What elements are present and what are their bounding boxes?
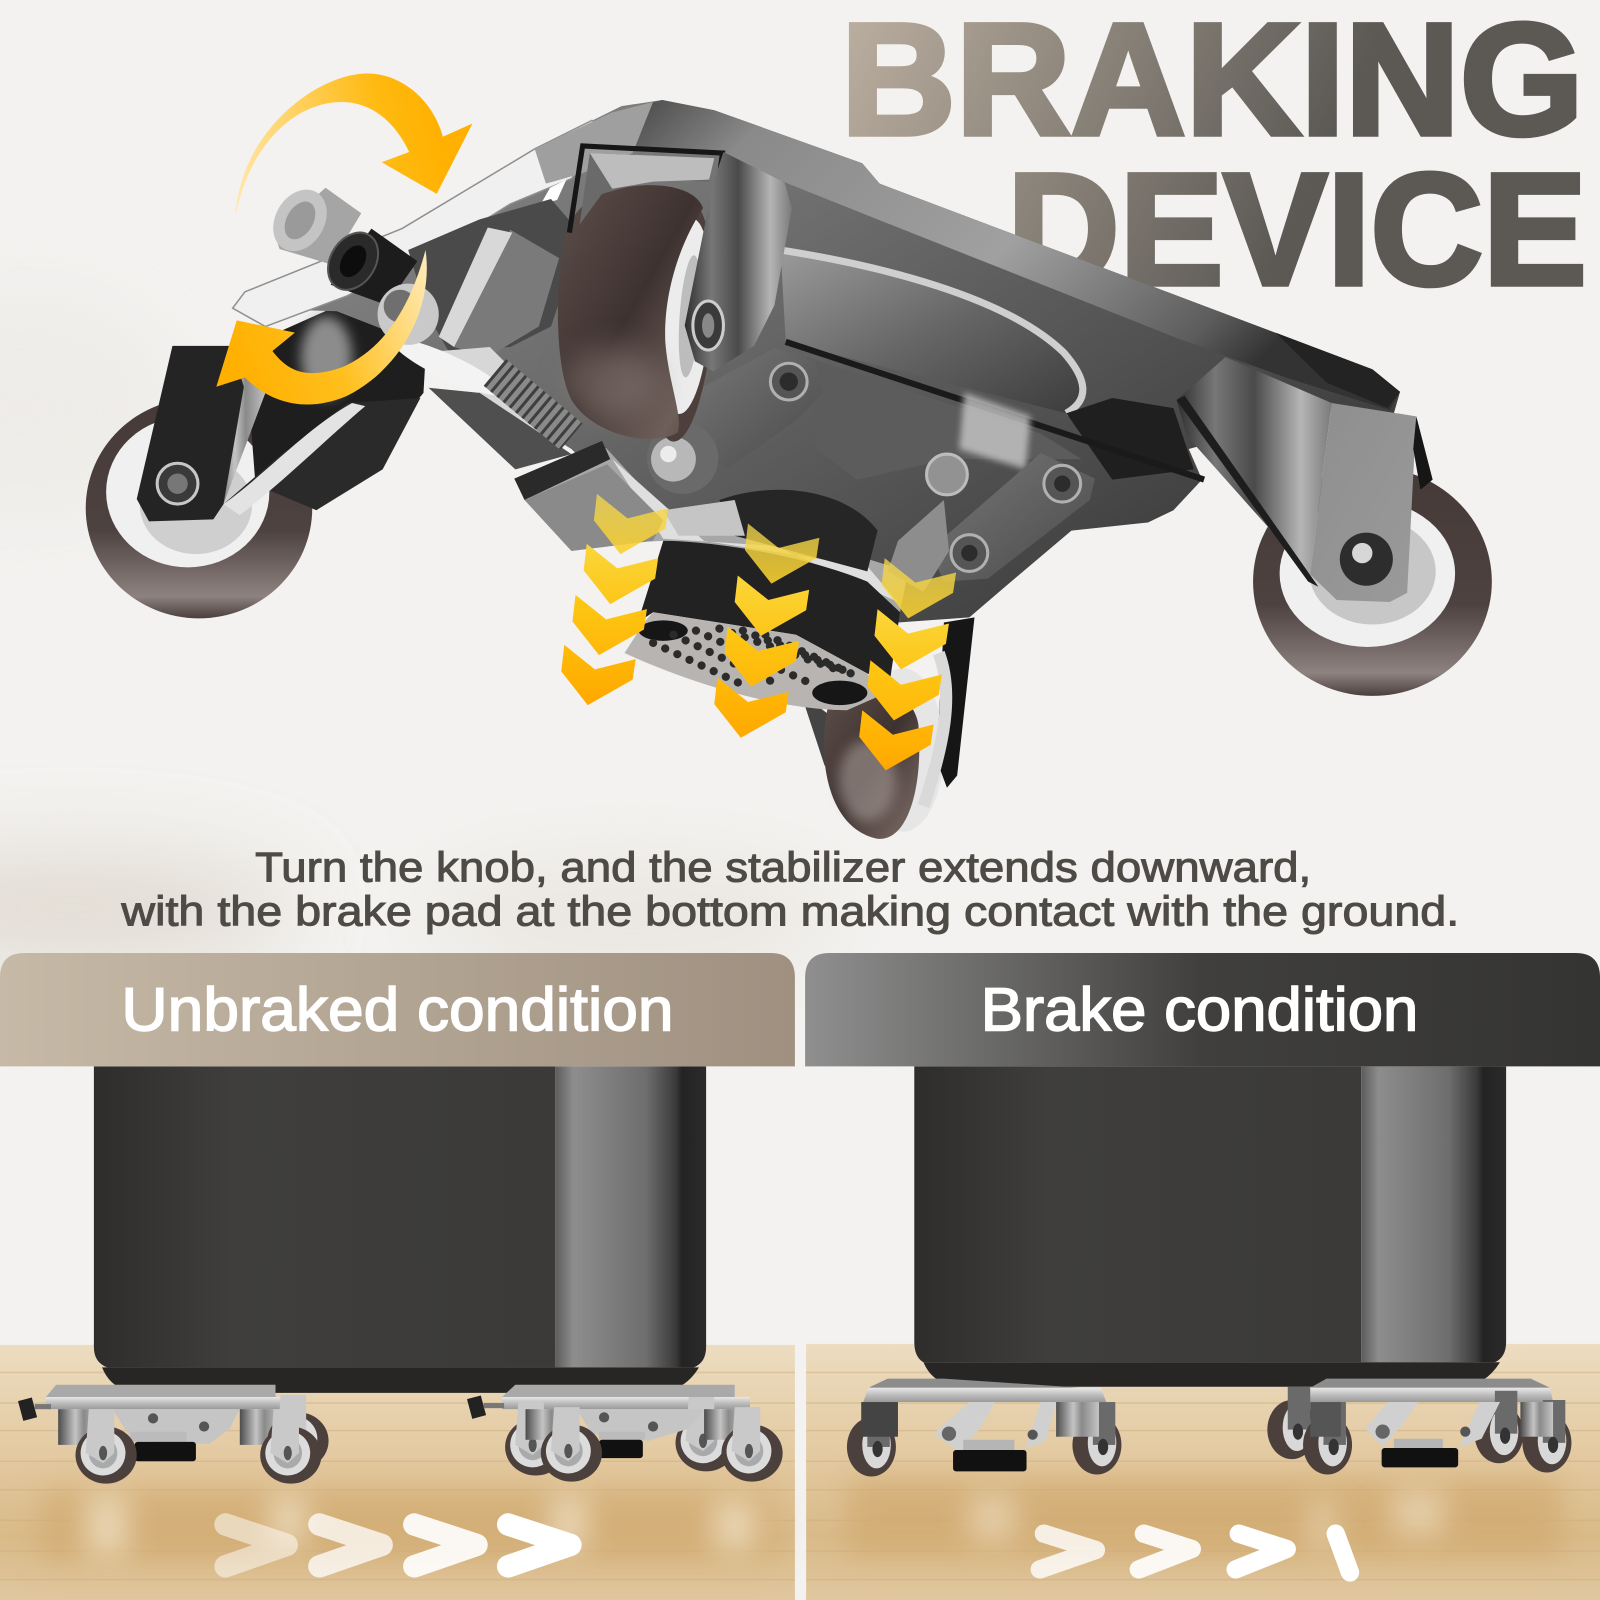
center wheel bracket [569, 146, 792, 371]
icon: stopped arrows and bar [1040, 1534, 1350, 1572]
right wheel [1253, 467, 1492, 696]
right scene backdrop [805, 1066, 1600, 1600]
left wheel [86, 398, 312, 618]
caster set left [847, 1379, 1121, 1477]
icon: downward chevrons column 2 [714, 523, 819, 738]
knob [262, 180, 439, 345]
icon: downward chevrons column 3 [859, 558, 956, 770]
heading: brake condition [805, 953, 1600, 1066]
left scene backdrop [0, 1066, 795, 1600]
title: braking device [841, 0, 1587, 318]
caster set left [18, 1385, 329, 1484]
caster set right [1267, 1379, 1571, 1474]
right wheel bracket [1177, 357, 1433, 602]
heading: unbraked condition: Unbraked condition [121, 976, 673, 1044]
description text: with the brake pad at the bottom making contact with the ground. [120, 888, 1459, 935]
panel: unbraked condition [0, 1066, 795, 1600]
icon: rotation arrow clockwise [236, 73, 472, 215]
link plate upper [684, 348, 822, 468]
heading: unbraked condition [0, 953, 795, 1066]
top edge strip [602, 100, 1400, 410]
pad studs [653, 629, 862, 686]
heading: brake condition: Brake condition [981, 976, 1418, 1044]
background [0, 0, 1600, 969]
bin [914, 1066, 1506, 1387]
right rivet [1340, 533, 1393, 586]
pad holes [639, 620, 867, 705]
center pivot block [514, 422, 908, 622]
left rivet [157, 463, 198, 504]
description text: Turn the knob, and the stabilizer extends downward, [255, 844, 1311, 891]
bin [94, 1066, 706, 1393]
adjusting screw [495, 372, 571, 437]
left wheel bracket [137, 346, 244, 521]
panel: brake condition [805, 1066, 1600, 1600]
recessed panel [781, 250, 1083, 413]
left swivel housing [213, 306, 429, 519]
center wheel [558, 185, 721, 444]
icon: rotation arrow counter-clockwise [216, 250, 427, 405]
brake pad [624, 541, 900, 710]
icon: moving arrows [226, 1524, 570, 1566]
caster set right [467, 1385, 783, 1482]
left silver arm [233, 120, 612, 327]
title: braking device: DEVICE [1007, 140, 1587, 318]
lower rear wheel [801, 617, 974, 839]
icon: downward chevrons column 1 [561, 494, 668, 705]
link plate lower right [888, 453, 1095, 592]
main plate body [233, 100, 1400, 622]
product: caster plate with brake [86, 73, 1492, 839]
center rivet [693, 301, 723, 350]
description text [120, 844, 1459, 935]
